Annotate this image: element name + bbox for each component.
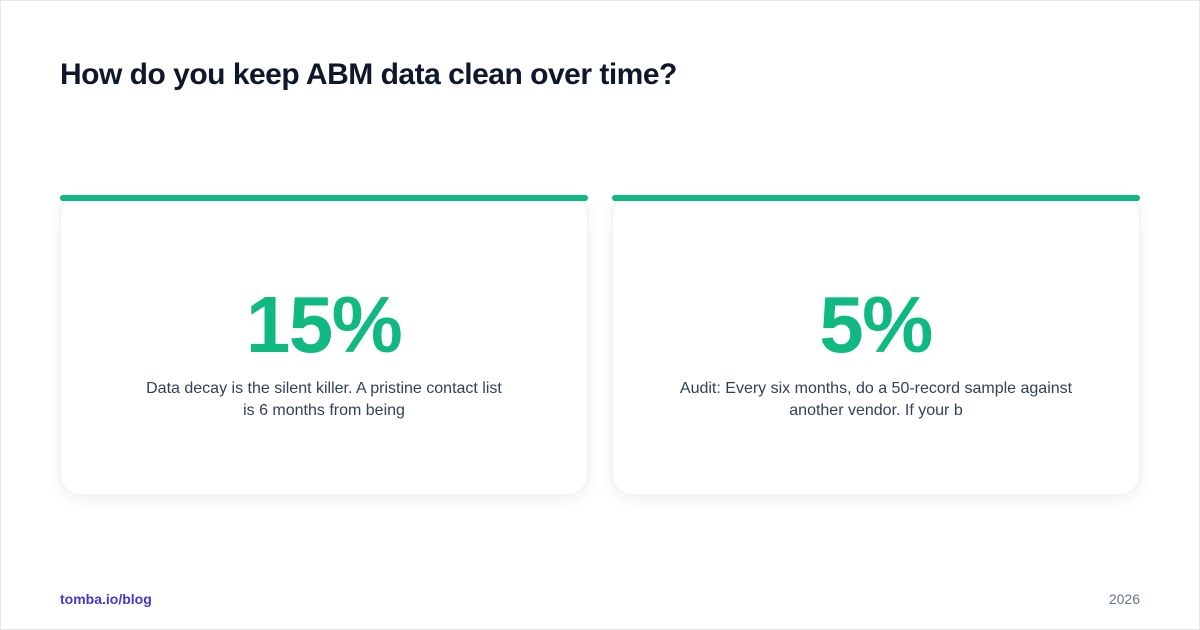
left card accent bar: [60, 195, 588, 201]
left stat description: is 6 months from being: [243, 402, 405, 419]
left stat number: 15%: [246, 280, 401, 369]
right card body: [612, 195, 1140, 495]
panel: left stat card: [60, 195, 588, 499]
panel: right stat card: [612, 195, 1140, 499]
title: How do you keep ABM data clean over time?: [60, 58, 677, 91]
left stat description: Data decay is the silent killer. A pristine contact list: [146, 380, 502, 397]
footer brand link: tomba.io/blog: [60, 591, 152, 607]
right stat description: another vendor. If your b: [789, 402, 963, 419]
footer year: 2026: [1109, 591, 1140, 607]
right stat description: Audit: Every six months, do a 50-record sample against: [680, 380, 1072, 397]
right card accent bar: [612, 195, 1140, 201]
right stat number: 5%: [819, 280, 932, 369]
left card body: [60, 195, 588, 495]
left stat description: [146, 380, 502, 419]
right stat description: [680, 380, 1072, 419]
